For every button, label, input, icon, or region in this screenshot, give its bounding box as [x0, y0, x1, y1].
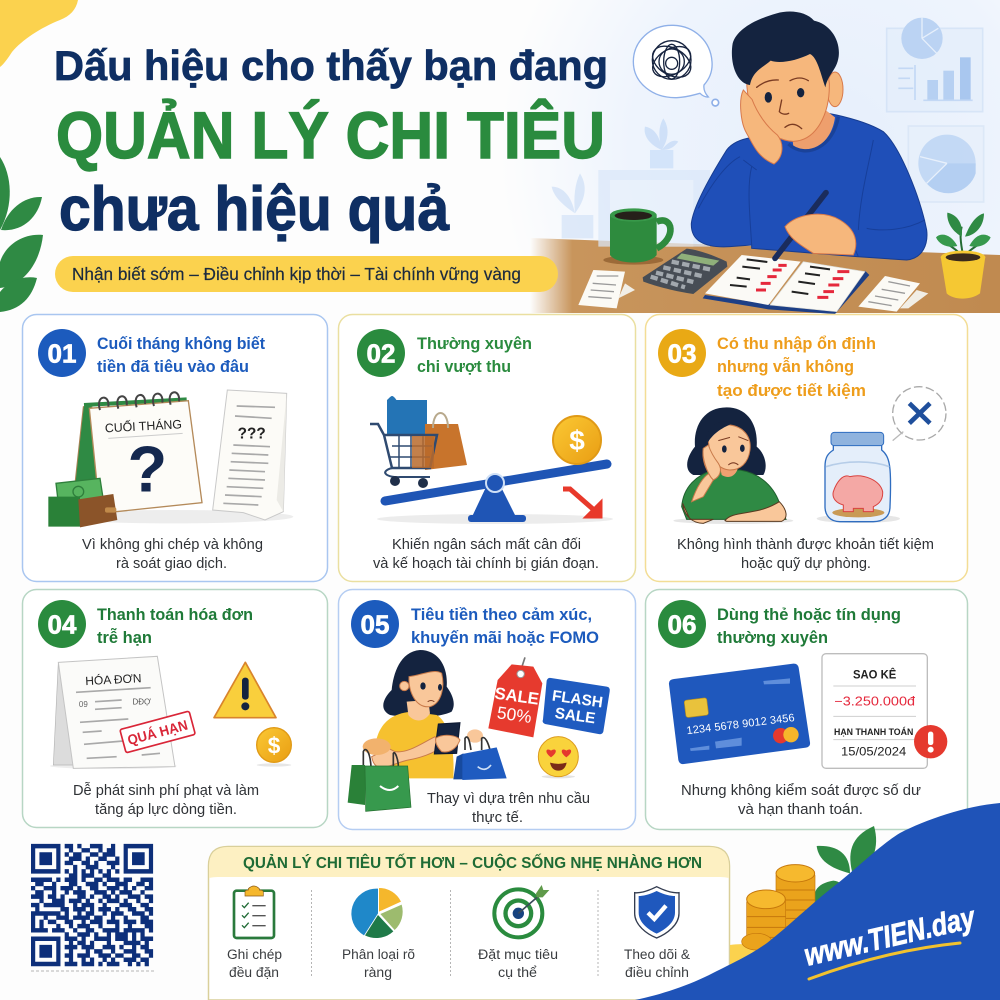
heading 02 [417, 334, 532, 376]
heading 06: Dùng thẻ hoặc tín dụng [717, 605, 901, 624]
heading 06 [717, 605, 901, 647]
statement with alert: HẠN THANH TOÁN [834, 726, 913, 737]
green mug [603, 208, 670, 265]
illustration: overdue invoice, warning sign, coin [50, 656, 291, 769]
statement with alert: −3.250.000đ [834, 695, 915, 709]
card 06 [646, 590, 968, 830]
number badge 03 [658, 329, 706, 377]
title [54, 42, 608, 244]
heading 04: Thanh toán hóa đơn [97, 605, 253, 624]
calculator [643, 249, 727, 294]
panel: better spending tips [208, 846, 730, 1000]
illustration: overdue invoice, warning sign, coin: QUÁ HẠN [126, 717, 189, 748]
body text 04: Dễ phát sinh phí phạt và làm [73, 782, 259, 799]
card 01 [22, 314, 328, 582]
tip 1: clipboard icon and label [227, 886, 282, 980]
eyes [765, 92, 772, 103]
illustration: overdue invoice, warning sign, coin: 09 [79, 700, 88, 709]
body text 06 [681, 783, 921, 818]
tip 2: pie chart icon and label [342, 888, 415, 980]
title: chưa hiệu quả [59, 175, 449, 244]
tip 3: target icon and label [478, 885, 558, 980]
card 05 [338, 590, 636, 830]
body text 04 [73, 782, 259, 818]
illustration: calendar, wallet and receipt [48, 390, 293, 527]
body text 06: Nhưng không kiểm soát được số dư [681, 783, 921, 799]
heading 04 [97, 605, 253, 647]
tip 4: shield icon and label [624, 887, 690, 980]
tip 2: pie chart icon and label: Phân loại rõ [342, 947, 415, 962]
number badge 02 [357, 329, 405, 377]
subtitle pill [55, 256, 558, 292]
tip 4: shield icon and label: Theo dõi & [624, 947, 690, 962]
tip 3: target icon and label: cụ thể [498, 965, 537, 980]
illustration: shopping woman, sale tags, emoji: SALE [554, 705, 596, 727]
illustration: shopping cart on seesaw with coin [370, 396, 613, 524]
card 04 [22, 590, 328, 828]
body text 02: và kế hoạch tài chính bị gián đoạn. [373, 556, 599, 572]
receipts on desk [578, 270, 928, 312]
number badge 03: 03 [668, 338, 696, 368]
illustration: credit card [669, 664, 810, 764]
ear [827, 72, 843, 107]
title: QUẢN LÝ CHI TIÊU [56, 98, 605, 172]
body text 05 [427, 791, 590, 826]
left leaves [0, 157, 43, 312]
body text 05: thực tế. [472, 810, 523, 826]
sweater [691, 113, 927, 260]
number badge 01 [38, 329, 86, 377]
tip 2: pie chart icon and label: ràng [364, 965, 392, 980]
yellow corner blob [0, 0, 78, 67]
hand on cheek [741, 90, 782, 164]
body text 03: Không hình thành được khoản tiết kiệm [677, 537, 934, 553]
writing hand with pen [775, 193, 856, 258]
heading 04: trễ hạn [97, 628, 152, 647]
number badge 02: 02 [367, 338, 395, 368]
body text 04: tăng áp lực dòng tiền. [95, 802, 237, 818]
body text 06: và hạn thanh toán. [738, 802, 863, 818]
gold coin stacks and leaves [730, 826, 876, 977]
illustration: credit card: 1234 5678 9012 3456 [686, 712, 795, 737]
illustration: shopping woman, sale tags, emoji: 50% [496, 702, 533, 727]
tip 1: clipboard icon and label: đều đặn [229, 965, 279, 980]
body text 05: Thay vì dựa trên nhu cầu [427, 791, 590, 807]
potted plant [936, 213, 991, 299]
heading 06: thường xuyên [717, 628, 828, 647]
body text 02: Khiến ngân sách mất cân đối [392, 537, 581, 553]
body text 03: hoặc quỹ dự phòng. [741, 556, 871, 572]
illustration: shopping woman, sale tags, emoji: SALE [493, 684, 540, 709]
illustration: sad woman and piggy bank jar [673, 387, 946, 524]
number badge 05: 05 [361, 610, 389, 640]
thought bubble [633, 25, 719, 106]
heading 05: khuyến mãi hoặc FOMO [411, 628, 599, 647]
number badge 04 [38, 600, 86, 648]
illustration: shopping woman, sale tags, emoji: FLASH [551, 688, 604, 711]
heading 02: Thường xuyên [417, 334, 532, 353]
header background wash [490, 0, 1000, 270]
subtitle pill: Nhận biết sớm – Điều chỉnh kịp thời – Tài chính vững vàng [72, 264, 521, 284]
number badge 06 [658, 600, 706, 648]
number badge 04: 04 [48, 610, 77, 640]
body text 01 [82, 537, 263, 572]
heading 05: Tiêu tiền theo cảm xúc, [411, 605, 592, 624]
tip 1: clipboard icon and label: Ghi chép [227, 947, 282, 962]
number badge 05 [351, 600, 399, 648]
face [747, 40, 829, 141]
QR code [31, 846, 153, 964]
heading 03: Có thu nhập ổn định [717, 334, 876, 353]
tip 3: target icon and label: Đặt mục tiêu [478, 947, 558, 962]
heading 01: tiền đã tiêu vào đâu [97, 357, 249, 376]
body text 01: Vì không ghi chép và không [82, 537, 263, 553]
illustration: calendar, wallet and receipt: ? [127, 433, 167, 506]
heading 01 [97, 334, 265, 376]
neck [792, 108, 835, 150]
statement with alert: 15/05/2024 [841, 745, 907, 758]
tip 4: shield icon and label: điều chỉnh [625, 965, 689, 980]
brows, nose and mouth [757, 78, 808, 129]
statement with alert [822, 654, 947, 768]
heading 05 [411, 605, 599, 647]
body text 02 [373, 537, 599, 572]
body text 03 [677, 537, 934, 572]
title: Dấu hiệu cho thấy bạn đang [54, 42, 608, 89]
illustration: shopping woman, sale tags, emoji [348, 650, 610, 811]
illustration: overdue invoice, warning sign, coin: DĐỢ [132, 697, 151, 706]
panel heading: QUẢN LÝ CHI TIÊU TỐT HƠN – CUỘC SỐNG NHẸ NHÀNG HƠN [243, 852, 702, 872]
number badge 06: 06 [668, 610, 696, 640]
illustration: shopping cart on seesaw with coin: $ [569, 425, 585, 456]
heading 03 [717, 334, 876, 400]
desk [530, 238, 1000, 313]
heading 01: Cuối tháng không biết [97, 334, 265, 353]
hair [732, 11, 839, 87]
open notebook [703, 255, 869, 314]
illustration: calendar, wallet and receipt: CUỐI THÁNG [104, 416, 182, 435]
illustration: overdue invoice, warning sign, coin: $ [268, 732, 281, 758]
statement with alert: SAO KÊ [853, 666, 896, 681]
card 02 [338, 314, 636, 582]
blue corner banner [635, 803, 1000, 1000]
number badge 01: 01 [48, 338, 76, 368]
background charts and plants [552, 18, 984, 247]
heading 03: nhưng vẫn không [717, 357, 854, 376]
card 03 [646, 314, 968, 582]
illustration: calendar, wallet and receipt: ??? [238, 425, 266, 442]
illustration: overdue invoice, warning sign, coin: HÓA ĐƠN [85, 670, 142, 688]
heading 02: chi vượt thu [417, 357, 511, 376]
header illustration: worried man at desk [552, 11, 991, 314]
body text 01: rà soát giao dịch. [116, 556, 227, 572]
heading 03: tạo được tiết kiệm [717, 381, 866, 400]
